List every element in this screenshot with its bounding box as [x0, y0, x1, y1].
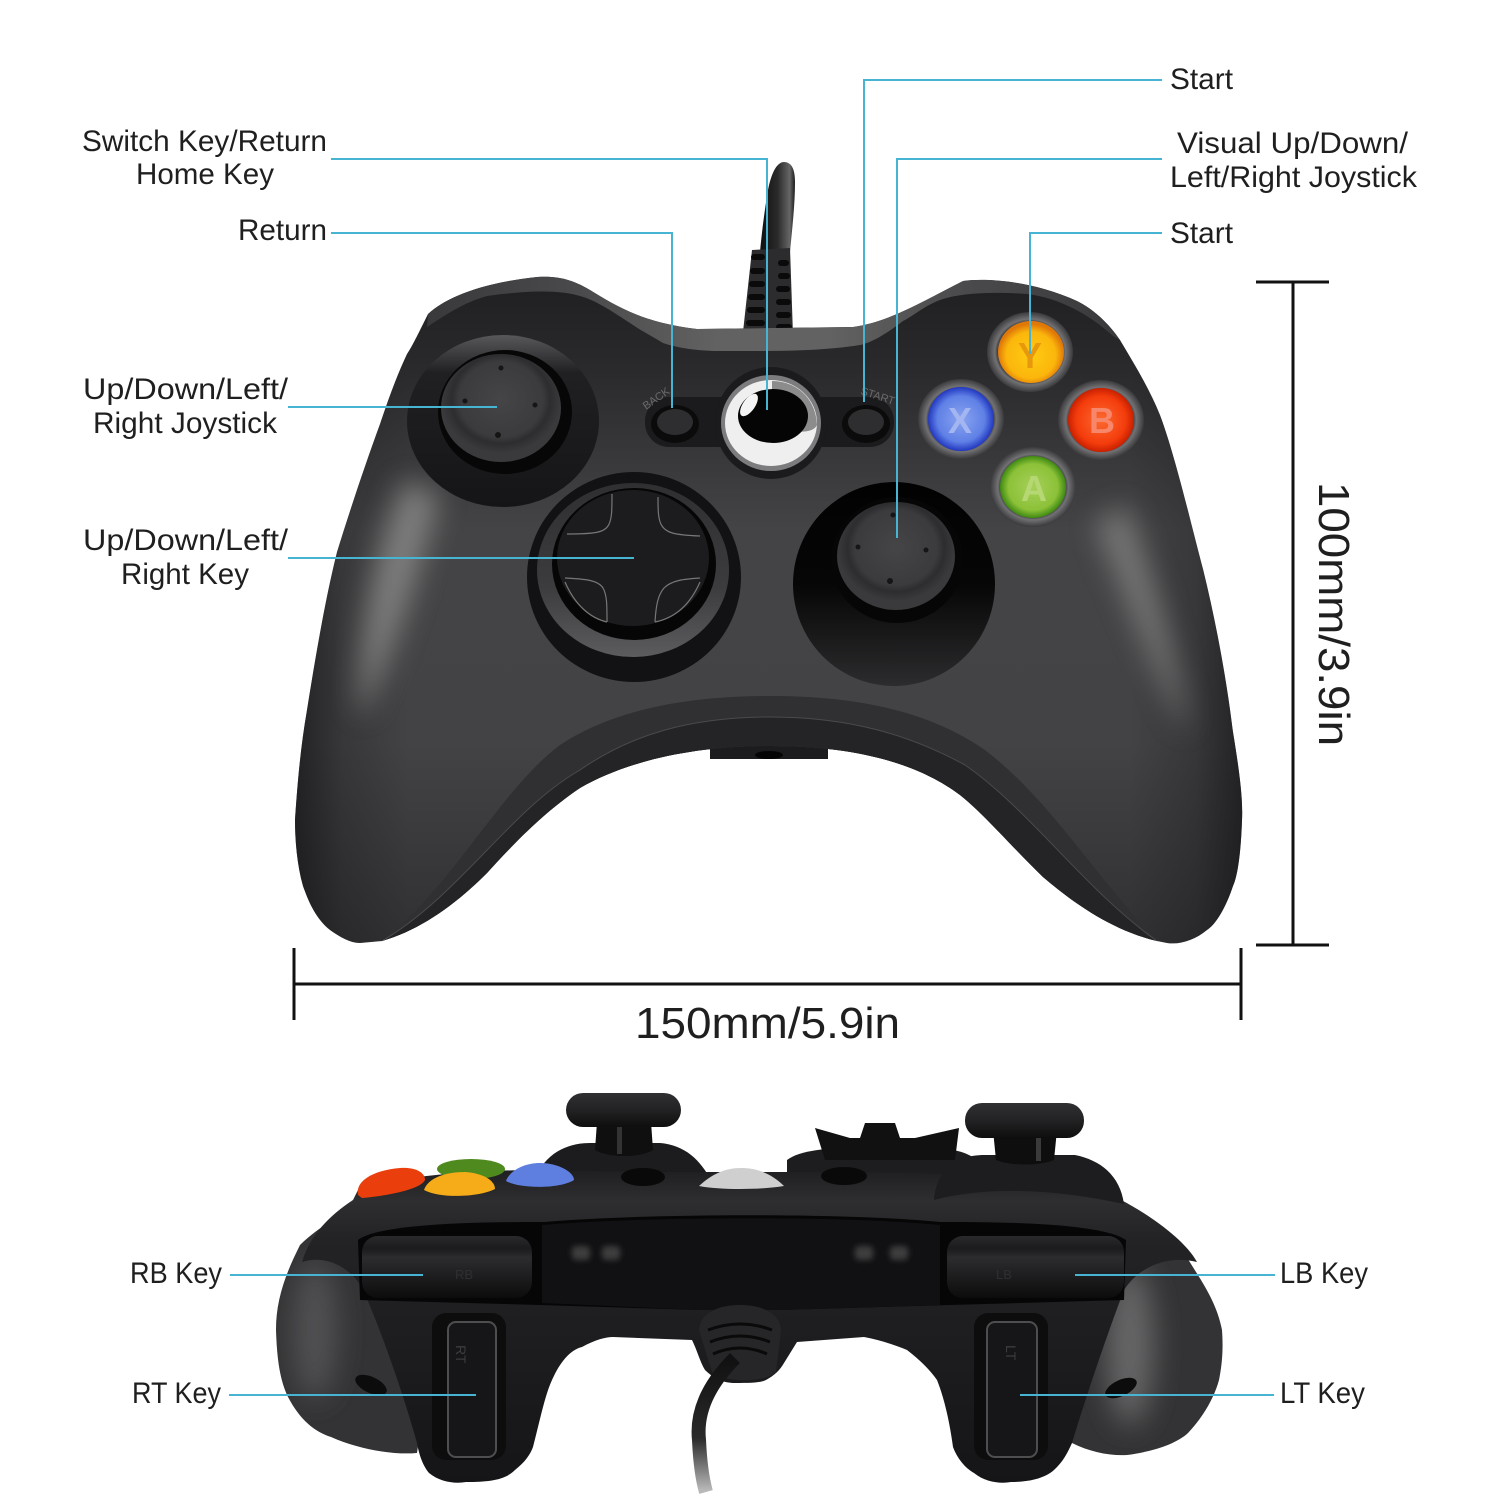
LT trigger — [974, 1313, 1048, 1460]
grip holes — [352, 1371, 1140, 1402]
LB bumper: LB — [996, 1267, 1012, 1282]
d-pad — [527, 472, 741, 682]
button B: B — [1089, 400, 1115, 441]
RT trigger: RT — [453, 1345, 469, 1364]
RB bumper — [362, 1236, 532, 1298]
label: Switch key: Home Key — [136, 158, 274, 191]
back button — [651, 405, 699, 443]
lower edge band, inner — [370, 717, 1167, 950]
bumper recess — [358, 1215, 1126, 1310]
leader lines: top controller — [288, 80, 1162, 558]
guide button: chrome — [699, 1168, 784, 1189]
label: d-pad: Right Key — [121, 558, 249, 591]
button X: X — [948, 400, 972, 441]
cable — [699, 1358, 735, 1492]
label: Start: Start — [1170, 63, 1234, 96]
label: left joystick: Up/Down/Left/ — [83, 373, 289, 406]
label: Switch key: Switch Key/Return — [82, 125, 327, 158]
connector port — [710, 740, 828, 759]
label: d-pad: Up/Down/Left/ — [83, 524, 289, 557]
button: green — [437, 1159, 505, 1179]
body shading — [295, 270, 1243, 950]
RT trigger — [432, 1313, 506, 1460]
controller body — [295, 277, 1242, 943]
button Y: Y — [1018, 335, 1042, 376]
centre gloss panel — [542, 1218, 940, 1310]
height label: 100mm/3.9in — [1309, 482, 1358, 746]
strain relief — [743, 248, 793, 335]
guide button ring — [721, 375, 821, 471]
back text: BACK — [641, 385, 673, 412]
right joystick — [793, 482, 995, 686]
grip highlights — [293, 1260, 1154, 1425]
lower edge band — [370, 696, 1167, 950]
centre plate: back, guide, start — [641, 367, 896, 479]
LT trigger: LT — [1003, 1345, 1019, 1361]
label: RB: RB Key — [130, 1257, 222, 1290]
joystick: bottom left — [536, 1093, 711, 1180]
button: yellow — [424, 1172, 495, 1196]
label: Visual joystick: Left/Right Joystick — [1170, 161, 1418, 194]
button A — [990, 447, 1076, 527]
label: LB: LB Key — [1280, 1257, 1368, 1290]
left joystick — [407, 335, 599, 507]
shoulder band — [427, 277, 1120, 351]
width label: 150mm/5.9in — [635, 999, 900, 1048]
button B — [1058, 380, 1144, 460]
controller: bottom view — [276, 1093, 1223, 1492]
joystick base: bottom right — [934, 1103, 1124, 1204]
centre body and trigger tines — [302, 1170, 1197, 1483]
LB bumper — [947, 1236, 1124, 1298]
left grip — [276, 1200, 440, 1453]
d-pad: bottom — [787, 1123, 980, 1182]
USB boot — [699, 1305, 781, 1380]
cable: top controller — [743, 162, 795, 335]
start button — [842, 405, 890, 443]
label: Start (face): Start — [1170, 217, 1234, 250]
controller: top view — [295, 270, 1243, 950]
button Y — [987, 312, 1073, 392]
label: LT: LT Key — [1280, 1377, 1365, 1410]
button X — [918, 379, 1004, 459]
label: left joystick: Right Joystick — [93, 407, 278, 440]
label: Visual joystick: Visual Up/Down/ — [1177, 127, 1409, 160]
button: red — [358, 1168, 425, 1198]
leader lines: bottom controller — [229, 1275, 1275, 1395]
dimension: height — [1256, 282, 1358, 945]
start text: START — [859, 385, 896, 408]
cross grooves — [565, 494, 700, 622]
dimension: width — [294, 948, 1241, 1048]
label: Return: Return — [238, 214, 327, 247]
button A: A — [1021, 468, 1047, 509]
label: RT: RT Key — [132, 1377, 221, 1410]
right grip — [1050, 1200, 1223, 1455]
button: blue — [506, 1163, 574, 1187]
guide button chrome — [772, 381, 817, 432]
RB bumper: RB — [455, 1267, 473, 1282]
small buttons — [621, 1167, 867, 1186]
